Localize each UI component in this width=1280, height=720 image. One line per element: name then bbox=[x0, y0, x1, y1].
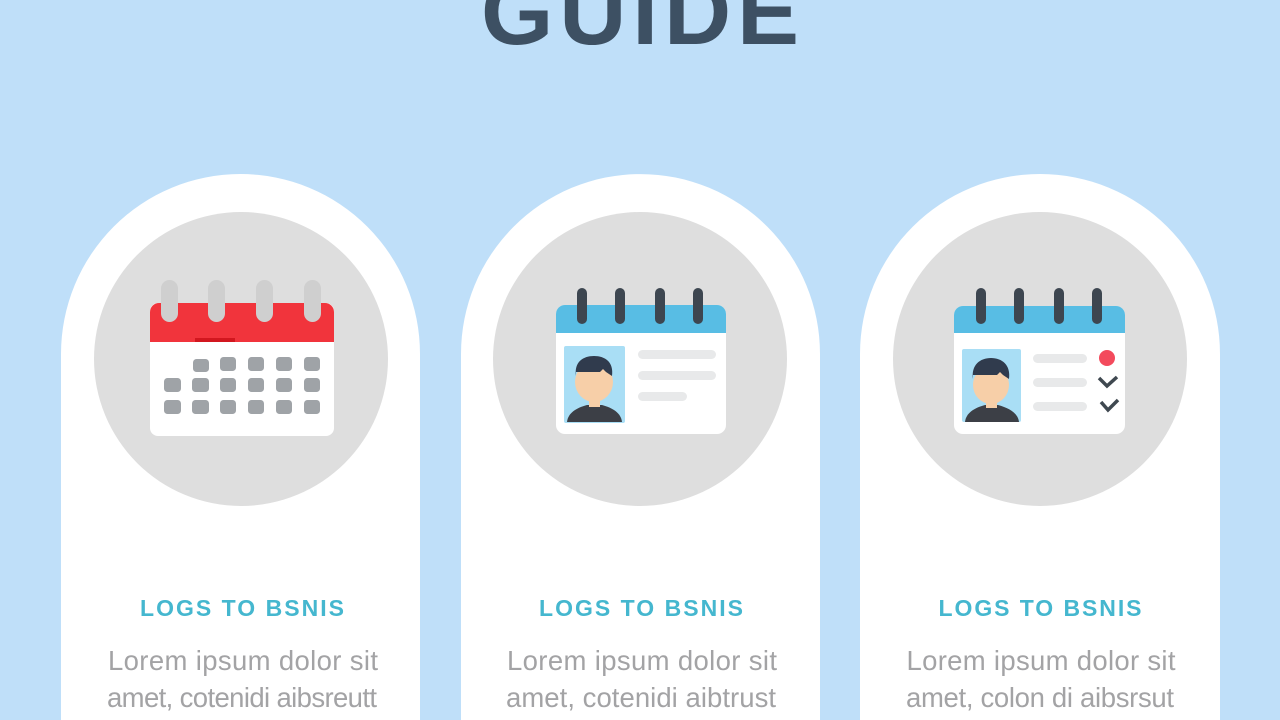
heading: LOGS TO BSNIS bbox=[539, 595, 743, 621]
body text: amet, cotenidi aibtrust bbox=[506, 682, 776, 713]
panel: profile card bbox=[461, 174, 820, 720]
icon circle: calendar bbox=[94, 212, 388, 506]
icon: red calendar bbox=[150, 280, 334, 436]
body text bbox=[906, 645, 1176, 713]
icon: checklist calendar bbox=[954, 288, 1125, 434]
heading: LOGS TO BSNIS bbox=[140, 595, 344, 621]
panel: calendar card bbox=[61, 174, 420, 720]
heading: LOGS TO BSNIS bbox=[938, 595, 1142, 621]
body text: Lorem ipsum dolor sit bbox=[906, 645, 1176, 676]
icon circle: profile bbox=[493, 212, 787, 506]
icon: profile calendar bbox=[556, 288, 726, 434]
panel: checklist card bbox=[860, 174, 1220, 720]
body text bbox=[506, 645, 777, 713]
body text: Lorem ipsum dolor sit bbox=[108, 645, 378, 676]
body text: amet, colon di aibsrsut bbox=[906, 682, 1174, 713]
icon circle: checklist bbox=[893, 212, 1187, 506]
body text bbox=[107, 645, 378, 713]
body text: amet, cotenidi aibsreutt bbox=[107, 682, 377, 713]
body text: Lorem ipsum dolor sit bbox=[507, 645, 777, 676]
